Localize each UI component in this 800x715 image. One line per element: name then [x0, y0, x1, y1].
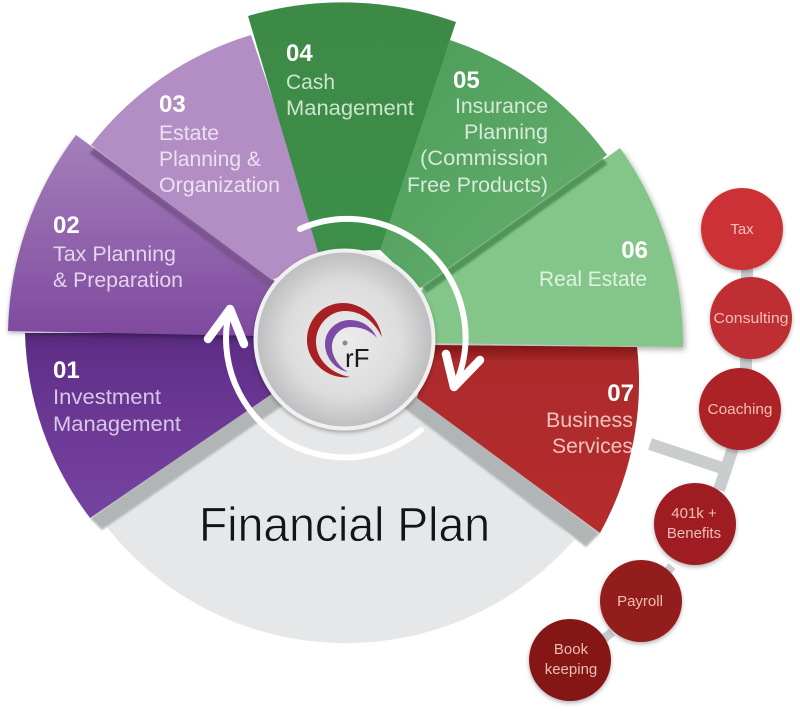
panel: 07 business services: Business	[546, 408, 633, 432]
panel: 03 estate planning and organization: Estate	[159, 121, 219, 145]
panel: 07 business services: Services	[552, 434, 633, 458]
circle: bookkeeping: keeping	[545, 661, 597, 678]
panel: financial plan base	[90, 392, 600, 643]
panel: 01 investment management: Investment	[53, 385, 161, 409]
circle: coaching	[699, 368, 781, 450]
panel: 05 insurance planning: 05	[453, 67, 480, 94]
panel: 05 insurance planning: (Commission	[420, 146, 548, 170]
panel: 05 insurance planning: Free Products)	[407, 173, 548, 197]
icon: purple crescent	[325, 320, 377, 372]
panel: 04 cash management	[248, 2, 456, 252]
circle: consulting	[710, 277, 792, 359]
circle: bookkeeping: Book	[554, 641, 589, 658]
heading: financial plan: Financial Plan	[199, 499, 490, 552]
panel: 06 real estate: 06	[621, 237, 648, 264]
icon: red crescent	[307, 303, 382, 377]
circle: coaching: Coaching	[708, 401, 772, 418]
panel: 01 investment management: Management	[53, 412, 181, 436]
panel: 04 cash management: 04	[286, 40, 313, 67]
panel: 03 estate planning and organization	[91, 35, 325, 280]
circle: tax: Tax	[730, 221, 754, 238]
panel: 06 real estate	[415, 148, 683, 347]
panel: 03 estate planning and organization: 03	[159, 91, 186, 118]
connector lines between service circles	[600, 262, 747, 642]
panel: 07 business services	[417, 345, 639, 533]
panel: 03 estate planning and organization: Planning &	[159, 147, 261, 171]
circle: 401k benefits: Benefits	[667, 525, 721, 542]
panel: 02 tax planning and preparation: & Preparation	[53, 268, 183, 292]
panel: 05 insurance planning: Insurance	[455, 94, 548, 118]
circle: bookkeeping	[529, 619, 611, 701]
arrow: clockwise bottom	[208, 309, 421, 457]
panel: 03 estate planning and organization: Organization	[159, 173, 280, 197]
circle: 401k benefits	[654, 483, 736, 565]
panel: 01 investment management	[25, 333, 285, 518]
panel: 06 real estate: Real Estate	[539, 267, 647, 291]
panel: 05 insurance planning: Planning	[464, 120, 548, 144]
panel: 05 insurance planning	[378, 40, 607, 290]
panel: 07 business services: 07	[607, 380, 634, 407]
central disc with logo	[256, 250, 434, 428]
arrow: clockwise top	[300, 219, 480, 387]
panel: 02 tax planning and preparation	[8, 135, 280, 336]
circle: consulting: Consulting	[714, 310, 788, 327]
circle: payroll: Payroll	[617, 593, 663, 610]
circle: 401k benefits: 401k +	[671, 505, 717, 522]
circle: payroll	[600, 560, 682, 642]
panel: 02 tax planning and preparation: Tax Planning	[53, 242, 176, 266]
icon: logo dot	[342, 340, 348, 346]
panel: 02 tax planning and preparation: 02	[53, 212, 80, 239]
logo text: rF	[345, 343, 370, 373]
panel: 01 investment management: 01	[53, 357, 80, 384]
circle: tax	[701, 188, 783, 270]
panel: 04 cash management: Management	[286, 96, 414, 120]
panel: 04 cash management: Cash	[286, 70, 335, 94]
